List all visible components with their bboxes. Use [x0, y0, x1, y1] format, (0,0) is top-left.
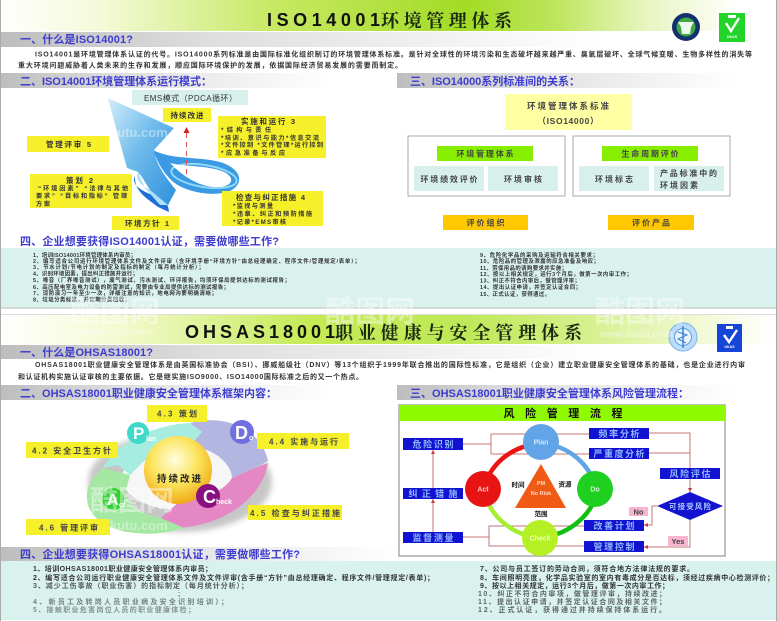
- label: management review 5: 管理评审 5: [46, 139, 91, 149]
- box: risk assessment: [660, 468, 720, 479]
- text block: left list: [33, 251, 360, 304]
- node: Act: [465, 471, 501, 507]
- triangle: PM No Risk: 时间: [512, 480, 525, 489]
- diagram: PDCA cycle: [26, 405, 349, 535]
- label: 4.3 planning: [147, 405, 207, 422]
- label: continual improvement: 持续改进: [170, 110, 204, 120]
- label: environmental policy 1: 环境方针 1: [125, 218, 169, 228]
- section heading: ISO14000 relations: 三、ISO14000系列标准间的关系：: [410, 74, 580, 88]
- diagram: ISO14000 standards relation: [408, 94, 730, 230]
- watermarks: 酷图网: [595, 296, 685, 329]
- triangle: PM No Risk: [512, 464, 572, 518]
- text block: left list: 3、节水计划/节电计划的制定及指标的制定（每月统计分析）；: [33, 263, 204, 271]
- segment: plan: [103, 423, 202, 475]
- label: 4.2 policy: 4.2 安全卫生方针: [32, 446, 111, 456]
- section heading: ISO14001 operating model: 二、ISO14001环境管理体系运行模式：: [20, 74, 212, 88]
- triangle: PM No Risk: 资源: [558, 480, 572, 488]
- node: Check: Check: [529, 536, 551, 542]
- text block: right list: [480, 251, 632, 298]
- icon: UKAS blue badge: [717, 324, 742, 352]
- label: checking 4: [222, 191, 323, 226]
- text block: left list: 4、识别环境因素，提出纠正措施并运行；: [33, 270, 138, 278]
- section heading: OHSAS risk process: [397, 385, 737, 400]
- badge: Check: heck: [216, 499, 232, 506]
- decision: acceptable risk: [657, 492, 723, 520]
- title band: OHSAS18001: 职业健康与安全管理体系: [335, 322, 583, 343]
- badge: Act: [102, 488, 126, 510]
- section heading: OHSAS certification work: [1, 547, 397, 561]
- arrowheads: [431, 450, 692, 549]
- text block: ISO14001 intro: ISO14001是环境管理体系认证的代号。ISO14000系列标准是由国际标准化组织制订的环境管理体系标准。是针对全球性的环境污染和生态破坏越来越严重、臭氧层破坏、全球气候变暖、生物多样性的消失等: [35, 50, 752, 58]
- box: monitoring: 监督测量: [412, 532, 454, 543]
- node: Act: Act: [477, 486, 489, 494]
- badge: Check: C: [203, 487, 216, 507]
- title band: OHSAS18001: OHSAS18001: [185, 322, 335, 342]
- node: Do: Do: [590, 486, 600, 494]
- panel: ISO14001 work list: [1, 248, 776, 308]
- text block: right list: 11、提出认证申请，并签定认证合同及相关文件；: [478, 597, 666, 606]
- label: checking 4: 检查与纠正措施 4: [236, 192, 306, 202]
- watermarks: www.ikutu.com: [599, 329, 673, 340]
- label: 4.3 planning: 4.3 策划: [157, 408, 197, 418]
- section heading: OHSAS framework: [1, 385, 331, 400]
- box: risk assessment: 风险评估: [670, 468, 710, 479]
- label: implementation 3: *应急准备与反应: [221, 149, 285, 157]
- box: hazard identification: 危险识别: [412, 438, 454, 450]
- label: 4.4 implementation: 4.4 实施与运行: [269, 436, 338, 446]
- process ring: [486, 445, 596, 535]
- text block: left list: 3、减少工伤事故（职业伤害）的指标制定（每月统计分析）；: [33, 581, 248, 590]
- section heading: what is OHSAS18001: 一、什么是OHSAS18001?: [20, 345, 153, 359]
- watermarks: [70, 125, 685, 533]
- label: Yes: [668, 536, 688, 546]
- triangle: PM No Risk: 范围: [534, 509, 548, 518]
- box: improvement plan: 改善计划: [594, 520, 634, 531]
- section heading: what is ISO14001: 一、什么是ISO14001?: [20, 32, 133, 46]
- badge: Do: D: [235, 423, 248, 443]
- title band: OHSAS18001: [1, 314, 776, 344]
- text block: OHSAS18001 intro: 和认证机构实施认证审核的主要依据。它是继实施ISO9000、ISO14000国际标准之后的又一个热点。: [18, 372, 363, 381]
- panel: life cycle assessment: 生命周期评价: [622, 148, 678, 158]
- label: 4.6 management review: 4.6 管理评审: [39, 522, 98, 532]
- box: frequency analysis: 频率分析: [598, 428, 640, 439]
- badge: Act: ct: [119, 502, 126, 509]
- top title band: ISO14001: [0, 0, 777, 31]
- badge: Do: o: [249, 435, 253, 442]
- text block: left list: ;: [178, 591, 180, 598]
- label: evaluate product: 评价产品: [632, 218, 670, 228]
- watermarks: www.ikutu.com: [79, 327, 153, 338]
- panel: OHSAS work list: [1, 561, 776, 620]
- sphere: continual improvement: 持续改进: [157, 473, 201, 485]
- text block: left list: 7、消防演习一年至少一次，详细注意的知识，地电网沟要明确清晰；: [33, 289, 217, 297]
- box: hazard identification: [403, 438, 463, 450]
- triangle: PM No Risk: No Risk: [531, 491, 552, 497]
- top title band: ISO14001: ISO14001: [267, 10, 380, 30]
- label: evaluate organization: [443, 215, 528, 230]
- panel: environmental management system: 环境审核: [504, 174, 542, 184]
- node: Plan: [523, 424, 559, 460]
- text block: OHSAS18001 intro: OHSAS18001职业健康安全管理体系是由英国标准协会（BSI）、挪威船级社（DNV）等13个组织于1999年联合推出的国际性标准，它是组织（企业）建立职业健康安全管理体系的基础，也是企业进行内审: [35, 360, 745, 369]
- label: implementation 3: [218, 116, 326, 158]
- text block: left list: 4、新员工及转岗人员职业病及安全识别培训）；: [33, 597, 228, 606]
- panel: environmental management system: 环境绩效评价: [420, 174, 478, 184]
- text block: right list: 10、纠正不符合内审项，做管理评审，持续改进；: [478, 589, 666, 598]
- label: implementation 3: 实施和运行 3: [241, 116, 295, 126]
- label: No: No: [634, 508, 644, 516]
- watermarks: 酷图网: [70, 296, 160, 329]
- icon: blue swoosh arrow: [108, 98, 239, 212]
- badge: Plan: [127, 422, 156, 444]
- box: frequency analysis: [589, 428, 649, 439]
- section heading: ISO14001 operating model: [1, 73, 331, 88]
- text block: left list: 5、噪音（厂界噪音测试），废气测试、污水测试、环评报告，均须环保局提供达标的测试报告；: [33, 276, 290, 284]
- chart header: [399, 405, 725, 421]
- segment: act: [87, 468, 184, 534]
- text block: right list: 14、提出认证申请，并签定认证合同；: [480, 283, 581, 291]
- text block: left list: 1、培训OHSAS18001职业健康安全管理体系内审员；: [33, 564, 212, 573]
- icon: UKAS blue badge: UKAS: [724, 345, 735, 349]
- box: management control: [584, 541, 644, 552]
- diagram: risk management flow: [399, 405, 725, 556]
- label: implementation 3: *文件控制 *文件管理*运行控制: [221, 141, 323, 149]
- label: checking 4: *记录*EMS审核: [233, 218, 287, 226]
- text block: OHSAS18001 intro: [18, 360, 745, 381]
- badge: Check: [196, 484, 232, 508]
- section heading: OHSAS framework: 二、OHSAS18001职业健康安全管理体系框架内容：: [20, 386, 277, 400]
- icon: UKAS green badge: UKAS: [727, 35, 738, 39]
- sphere: continual improvement: [144, 436, 212, 504]
- box: corrective measures: 纠正错施: [408, 488, 458, 499]
- panel: environmental management system: [408, 136, 565, 196]
- section heading: OHSAS risk process: 三、OHSAS18001职业健康安全管理体系风险管理流程：: [410, 386, 689, 400]
- badge: Do: [230, 420, 254, 444]
- decision: acceptable risk: 可接受风险: [669, 501, 712, 511]
- text block: ISO14001 intro: [18, 50, 752, 70]
- text block: left list: 8、垃圾分类标准，并定期分类回收；: [33, 296, 130, 304]
- label: planning 2: 要求” “目标和指标” 管理: [36, 192, 128, 200]
- text block: right list: 9、按以上相关规定，运行3个月后，做第一次内审工作；: [480, 581, 669, 590]
- box: standard title: （ISO14000）: [538, 116, 598, 126]
- panel: life cycle assessment: 环境因素: [660, 180, 698, 190]
- label: planning 2: [30, 174, 132, 208]
- chart header: 风 险 管 理 流 程: [504, 406, 622, 420]
- text block: left list: 2、编写适合公司运行环境管理体系文件及文件评审（含环境手册“环境方针”由总经理确定、程序文件/管理规定/表单）；: [33, 257, 360, 265]
- label: checking 4: *监视与测量: [233, 202, 273, 210]
- panel: life cycle assessment: [573, 136, 730, 196]
- label: 4.6 management review: [26, 519, 110, 535]
- text block: left list: 6、高压配电室及电力设备的防雷测试，需要由专业局提供达标的测试报告；: [33, 283, 229, 291]
- label: 4.4 implementation: [257, 433, 349, 449]
- box: standard title: 环境管理体系标准: [527, 101, 609, 111]
- label: 4.5 checking: 4.5 检查与纠正措施: [250, 508, 340, 518]
- chart title: EMS model: [132, 90, 248, 105]
- text block: right list: 9、危险化学品的采购及运输符合相关要求；: [480, 251, 598, 259]
- text block: right list: [478, 564, 774, 614]
- label: planning 2: 方案: [36, 200, 51, 208]
- section heading: ISO14001 certification work: 四、企业想要获得ISO14001认证，需要做哪些工作?: [20, 234, 279, 248]
- arrow: red dashed improvement: [184, 127, 190, 176]
- watermarks: 酷图网: [90, 485, 174, 516]
- text block: left list: 2、编写适合公司运行职业健康安全管理体系文件及文件评审(含手册“方针”由总经理确定、程序文件/管理规定/表单)；: [33, 573, 434, 582]
- label: implementation 3: *结构与责任: [221, 126, 271, 134]
- panel: life cycle assessment: 环境标志: [595, 174, 633, 184]
- label: environmental policy 1: [112, 216, 179, 230]
- label: planning 2: “环境因素” “法律与其他: [38, 184, 129, 192]
- box: standard title: [505, 94, 632, 130]
- text block: right list: 8、车间照明亮度，化学品实验室的室内有毒成分是否达标，须经过疾病中心检测评价；: [480, 573, 774, 582]
- label: evaluate product: [608, 215, 694, 230]
- text block: right list: 10、危险品的管理及泄露的应急准备及响应；: [480, 257, 599, 265]
- label: evaluate organization: 评价组织: [466, 218, 504, 228]
- box: monitoring: [403, 532, 463, 543]
- node: Do: [577, 471, 613, 507]
- chart title: EMS model: EMS模式（PDCA循环）: [144, 93, 237, 103]
- watermarks: 酷图网: [325, 296, 415, 329]
- triangle: PM No Risk: PM: [537, 481, 546, 487]
- connector lines: [433, 433, 690, 547]
- label: checking 4: *违章、纠正和预防措施: [233, 210, 313, 218]
- section heading: what is ISO14001: [1, 32, 601, 47]
- text block: right list: 7、公司与员工签订的劳动合同，须符合地方法律法规的要求。: [480, 564, 694, 573]
- section heading: what is OHSAS18001: [1, 345, 601, 359]
- watermarks: kutu.com: [110, 518, 168, 533]
- watermarks: kutu.com: [110, 125, 168, 140]
- section heading: ISO14000 relations: [397, 73, 737, 88]
- segment: do: [190, 420, 268, 478]
- label: planning 2: 策划 2: [66, 175, 93, 185]
- icon: UKAS green badge: [719, 13, 745, 42]
- label: management review 5: [27, 136, 109, 152]
- badge: Plan: lan: [146, 436, 156, 443]
- badge: Act: A: [107, 492, 119, 509]
- panel: life cycle assessment: 产品标准中的: [660, 168, 717, 178]
- text block: right list: 11、劳保用品的请购要求并实施；: [480, 264, 567, 272]
- node: Check: [522, 520, 558, 556]
- label: 4.2 policy: [26, 442, 118, 458]
- text block: left list: 1、培训ISO14001环境管理体系内审员；: [33, 251, 136, 259]
- top title band: ISO14001: 环境管理体系: [381, 10, 513, 31]
- panel: environmental management system: 环境管理体系: [456, 148, 514, 158]
- text block: left list: 5、接触职业危害岗位人员的职业健康体检；: [33, 605, 195, 614]
- section heading: OHSAS certification work: 四、企业想要获得OHSAS18001认证，需要做哪些工作?: [20, 547, 300, 561]
- icon: ISO round logo: [672, 13, 700, 41]
- text block: left list: [33, 564, 434, 614]
- box: management control: 管理控制: [594, 541, 634, 552]
- label: 4.5 checking: [248, 505, 342, 520]
- label: Yes: Yes: [672, 537, 684, 546]
- text block: right list: 12、按以上相关规定，运行3个月后，做第一次内审工作；: [480, 270, 632, 278]
- badge: Plan: P: [133, 424, 144, 443]
- label: continual improvement: [163, 108, 211, 122]
- label: No: [629, 507, 648, 516]
- text block: right list: 13、纠正不符合内审后，做管理评审；: [480, 276, 580, 284]
- segment: check: [161, 463, 268, 528]
- node: Plan: Plan: [534, 440, 548, 446]
- box: severity analysis: 严重度分析: [594, 448, 644, 459]
- text block: ISO14001 intro: 重大环境问题威胁着人类未来的生存和发展，顺应国际环境保护的发展，依据国际经济贸易发展的需要而制定。: [18, 60, 402, 70]
- diagram: EMS PDCA arrow model: [27, 90, 326, 230]
- icon: WHO emblem: [669, 323, 697, 351]
- text block: right list: 15、正式认证，获得通过。: [480, 290, 550, 298]
- box: improvement plan: [584, 520, 644, 531]
- label: implementation 3: *培训、意识与能力*信息交流: [221, 134, 320, 142]
- text block: right list: 12、正式认证，获得通过并持续保持体系运行。: [478, 605, 666, 614]
